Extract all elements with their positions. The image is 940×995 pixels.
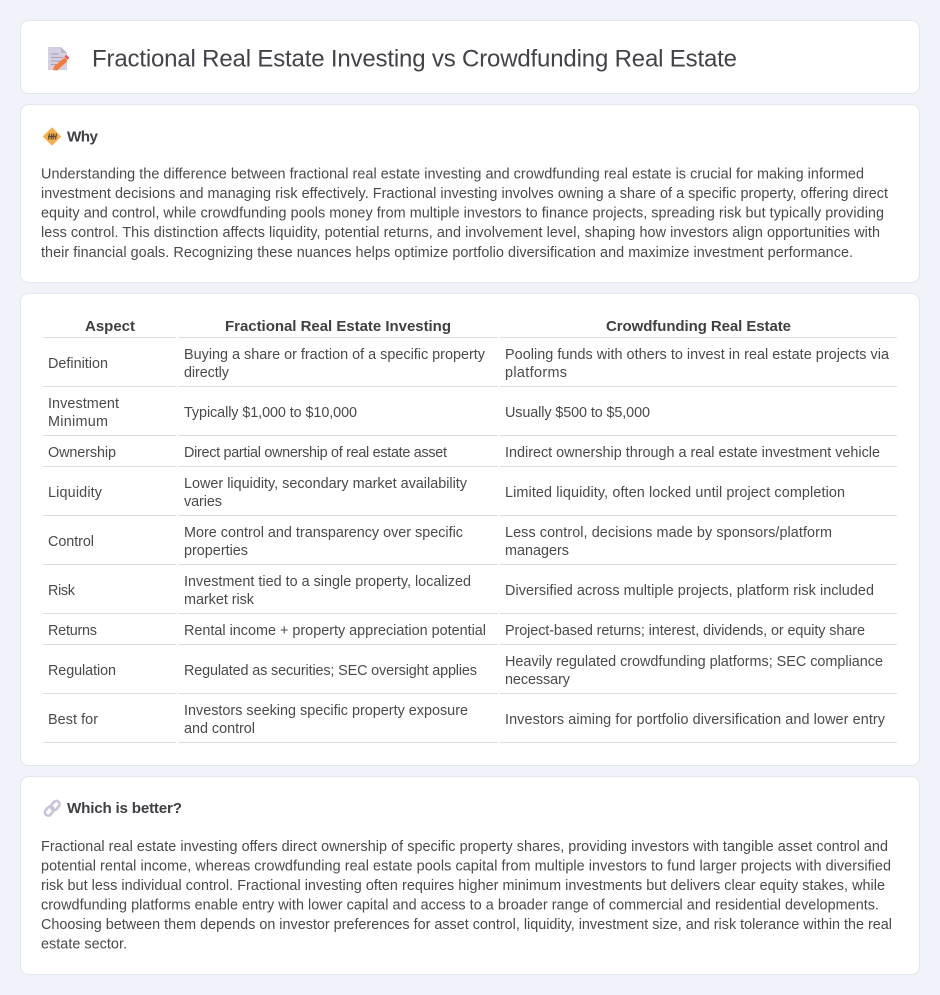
row: returns (43, 623, 897, 645)
row: regulation: Heavily regulated crowdfunding platforms; SEC compliance (505, 654, 883, 670)
text block: which is better paragraph: estate sector. (41, 936, 127, 952)
row: regulation: Regulation (48, 663, 116, 679)
row: control: managers (505, 543, 569, 559)
row: ownership (43, 445, 897, 467)
text block: why paragraph: their financial goals. Recognizing these nuances helps optimize portfolio diversification and maximize investment performance. (41, 245, 853, 261)
row: liquidity (43, 476, 897, 516)
row: ownership: Direct partial ownership of real estate asset (184, 445, 447, 461)
row: returns: Rental income + property appreciation potential (184, 623, 486, 639)
row: risk: market risk (184, 592, 255, 608)
row: investment minimum: Usually $500 to $5,000 (505, 405, 650, 421)
row: control (43, 525, 897, 565)
text block: why paragraph: investment decisions and managing risk effectively. Fractional investing involves owning a share of a specific property, offering direct (41, 186, 888, 202)
text block: which is better paragraph: crowdfunding platforms enable entry with lower capital and access to a broader range of commercial and residential developments. (41, 898, 879, 914)
row: best for: Investors aiming for portfolio diversification and lower entry (505, 712, 886, 728)
row: definition: directly (184, 365, 230, 381)
row: control: More control and transparency over specific (184, 525, 463, 541)
icon: document with pencil (48, 47, 69, 70)
row: definition: platforms (505, 365, 567, 381)
row: investment minimum (43, 396, 897, 436)
text block: which is better paragraph: Choosing between them depends on investor preferences for asset control, liquidity, investment size, and risk tolerance within the real (41, 917, 892, 933)
panel: which is better (20, 776, 920, 974)
text block: why paragraph: Understanding the difference between fractional real estate investing and crowdfunding real estate is crucial for making informed (41, 166, 864, 182)
row: best for: Best for (48, 712, 98, 728)
row: risk: Risk (48, 583, 76, 599)
row: control: Control (48, 534, 94, 550)
text block: which is better paragraph: Fractional real estate investing offers direct ownership of specific property shares, providing investors with tangible asset control and (41, 839, 888, 855)
row: definition (43, 347, 897, 387)
text block: which is better paragraph: potential rental income, whereas crowdfunding real estate pools capital from multiple investors to fund larger projects with diversified (41, 858, 891, 874)
heading: which is better: Which is better? (67, 800, 182, 817)
row: regulation: Regulated as securities; SEC oversight applies (184, 663, 477, 679)
text block: which is better paragraph (41, 839, 892, 952)
row: definition: Buying a share or fraction of a specific property (184, 347, 486, 363)
title: Fractional Real Estate Investing vs Crowdfunding Real Estate (92, 46, 737, 72)
row: returns: Returns (48, 623, 97, 639)
row: definition: Definition (48, 356, 108, 372)
row: investment minimum: Investment (48, 396, 119, 412)
row: liquidity: Limited liquidity, often locked until project completion (505, 485, 845, 501)
row: liquidity: varies (184, 494, 222, 510)
row: definition: Pooling funds with others to invest in real estate projects via (505, 347, 889, 363)
panel: comparison table (20, 294, 920, 766)
row: liquidity: Lower liquidity, secondary market availability (184, 476, 468, 492)
icon: orange diamond sign (44, 128, 60, 145)
heading: why: Why (67, 128, 99, 146)
panel: why (20, 104, 920, 282)
table header row: Fractional Real Estate Investing (225, 318, 451, 335)
row: liquidity: Liquidity (48, 485, 103, 501)
row: risk (43, 574, 897, 614)
panel: title header (20, 20, 920, 94)
row: control: properties (184, 543, 248, 559)
row: best for: Investors seeking specific property exposure (184, 703, 468, 719)
row: control: Less control, decisions made by sponsors/platform (505, 525, 832, 541)
text block: which is better paragraph: risk but less individual control. Fractional investing often requires higher minimum investments but delivers clear equity stakes, while (41, 878, 885, 894)
row: best for (43, 703, 897, 743)
text block: why paragraph: less control. This distinction affects liquidity, potential returns, and involvement level, shaping how investors align opportunities with (41, 225, 880, 241)
row: returns: Project-based returns; interest, dividends, or equity share (505, 623, 865, 639)
row: risk: Diversified across multiple projects, platform risk included (505, 583, 874, 599)
row: ownership: Indirect ownership through a real estate investment vehicle (505, 445, 880, 461)
table header row (43, 318, 897, 338)
row: ownership: Ownership (48, 445, 116, 461)
table header row: Crowdfunding Real Estate (606, 318, 791, 335)
text block: why paragraph: equity and control, while crowdfunding pools money from multiple investors to finance projects, spreading risk but typically providing (41, 206, 884, 222)
row: best for: and control (184, 721, 255, 737)
row: regulation (43, 654, 897, 694)
icon: chain link (44, 800, 61, 817)
row: investment minimum: Minimum (48, 414, 108, 430)
table header row: Aspect (85, 318, 135, 335)
row: regulation: necessary (505, 672, 571, 688)
row: investment minimum: Typically $1,000 to $10,000 (184, 405, 357, 421)
text block: why paragraph (41, 166, 888, 261)
row: risk: Investment tied to a single property, localized (184, 574, 471, 590)
